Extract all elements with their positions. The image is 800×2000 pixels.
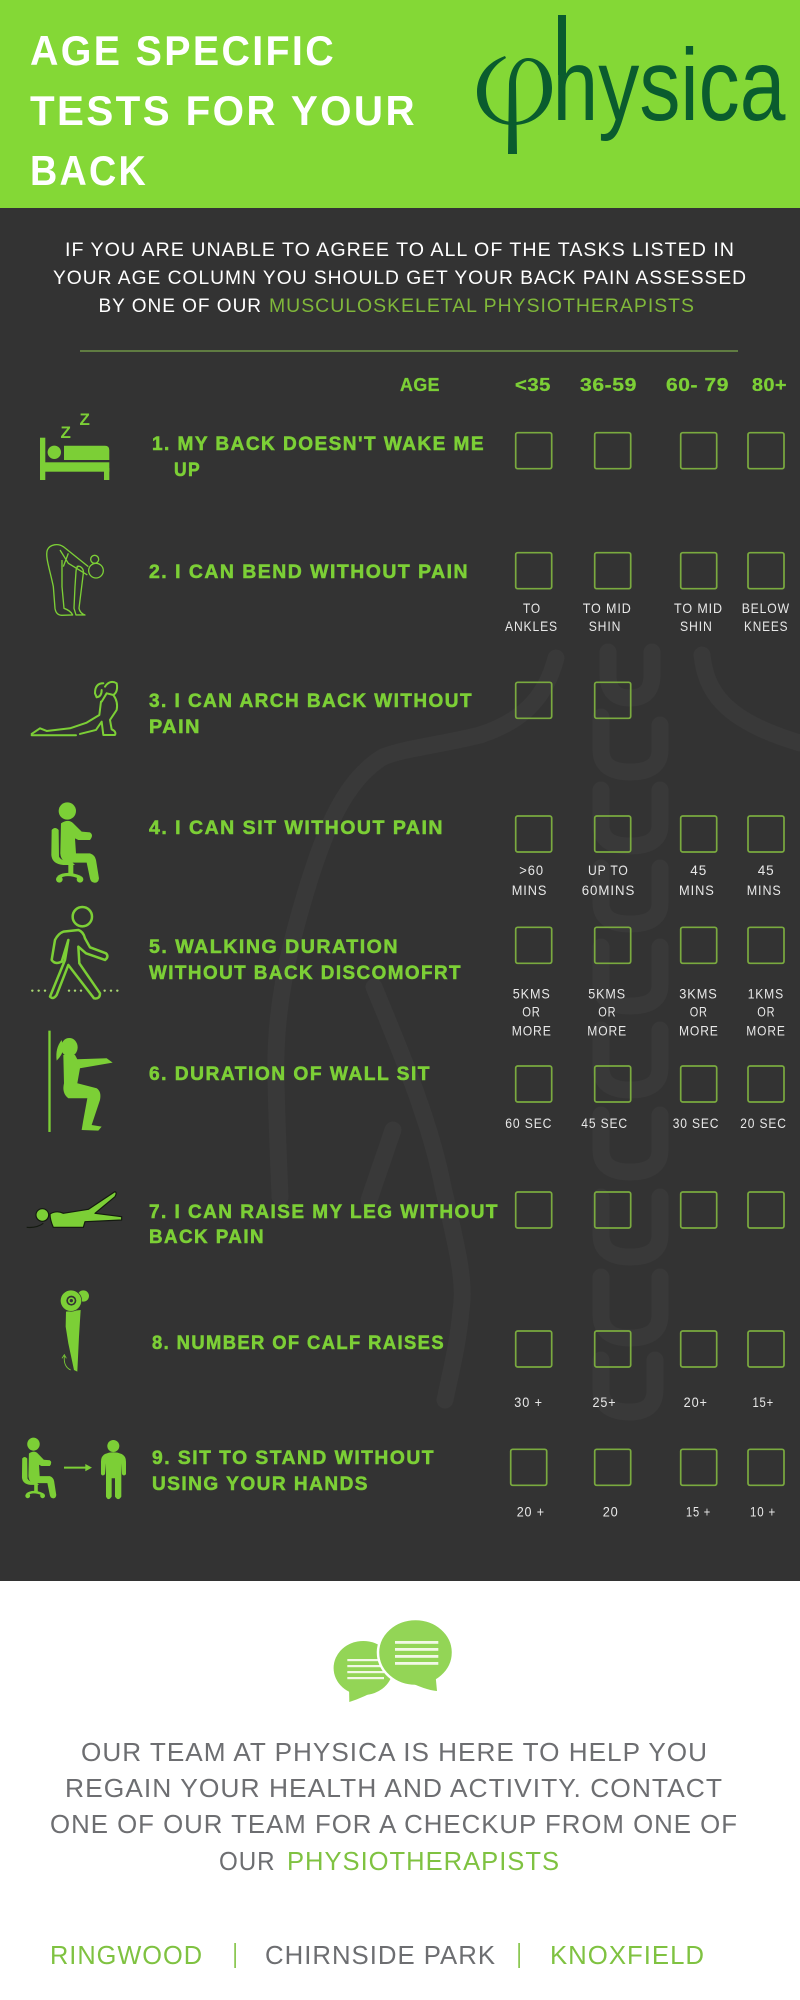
option labels: 3KMS xyxy=(679,986,718,1002)
heading: PAIN xyxy=(149,716,201,738)
intro text: BY ONE OF OUR xyxy=(98,295,262,317)
option labels: 30 + xyxy=(514,1394,543,1410)
option labels xyxy=(514,1394,774,1410)
option labels: 15 + xyxy=(686,1504,711,1520)
row 2: bend xyxy=(47,545,790,634)
option labels: OR xyxy=(690,1004,708,1020)
title xyxy=(30,27,417,194)
option labels: KNEES xyxy=(744,618,788,634)
icon: bed: Z xyxy=(60,423,71,442)
heading: 3. I CAN ARCH BACK WITHOUT xyxy=(149,690,473,712)
heading xyxy=(152,433,485,481)
heading: 6. DURATION OF WALL SIT xyxy=(149,1063,431,1085)
option labels: TO xyxy=(523,600,541,616)
age column headers: 80+ xyxy=(752,375,787,395)
checkboxes xyxy=(516,553,784,589)
option labels: MORE xyxy=(512,1022,552,1038)
footer message: OUR TEAM AT PHYSICA IS HERE TO HELP YOU xyxy=(81,1737,708,1767)
icon: wall sit xyxy=(48,1031,113,1132)
age column headers: 60- 79 xyxy=(666,375,729,395)
heading: 9. SIT TO STAND WITHOUT xyxy=(152,1447,435,1469)
clinic locations: KNOXFIELD xyxy=(550,1940,705,1970)
option labels: 20 + xyxy=(517,1504,545,1520)
option labels xyxy=(505,1115,787,1131)
checkboxes xyxy=(516,816,784,852)
heading: 8. NUMBER OF CALF RAISES xyxy=(152,1332,445,1354)
option labels: 60MINS xyxy=(582,882,635,898)
option labels: MINS xyxy=(512,882,547,898)
footer message xyxy=(50,1737,738,1876)
heading: BACK PAIN xyxy=(149,1226,265,1248)
age column headers: 36-59 xyxy=(580,375,637,395)
panel: dark test table xyxy=(0,208,800,1581)
title: AGE SPECIFIC xyxy=(30,27,336,74)
row 4: sit xyxy=(51,802,784,898)
intro text: MUSCULOSKELETAL PHYSIOTHERAPISTS xyxy=(269,295,695,317)
heading: 5. WALKING DURATION xyxy=(149,936,399,958)
checkboxes xyxy=(516,927,784,963)
option labels: OR xyxy=(757,1004,775,1020)
option labels: 1KMS xyxy=(748,986,784,1002)
option labels: SHIN xyxy=(589,618,621,634)
row 1: sleep xyxy=(40,410,784,481)
option labels xyxy=(512,862,782,898)
heading: WITHOUT BACK DISCOMOFRT xyxy=(149,962,462,984)
heading: 7. I CAN RAISE MY LEG WITHOUT xyxy=(149,1201,499,1223)
option labels: SHIN xyxy=(680,618,713,634)
clinic locations: CHIRNSIDE PARK xyxy=(265,1940,496,1970)
option labels: 20 xyxy=(603,1504,619,1520)
intro text: YOUR AGE COLUMN YOU SHOULD GET YOUR BACK PAIN ASSESSED xyxy=(53,267,747,289)
footer message: REGAIN YOUR HEALTH AND ACTIVITY. CONTACT xyxy=(65,1773,723,1803)
option labels: 45 xyxy=(758,862,775,878)
logo: physica xyxy=(477,15,786,154)
option labels: 45 xyxy=(690,862,707,878)
checkboxes xyxy=(516,1192,784,1228)
heading xyxy=(149,1201,499,1248)
checkboxes xyxy=(511,1449,784,1485)
panel: header xyxy=(0,0,800,208)
age column headers: <35 xyxy=(515,375,551,395)
icon: cobra stretch xyxy=(32,682,117,735)
footer message: PHYSIOTHERAPISTS xyxy=(287,1846,560,1876)
row 7: leg raise xyxy=(27,1192,784,1248)
option labels: ANKLES xyxy=(505,618,558,634)
checkboxes xyxy=(516,433,784,469)
watermark: back and spine outline xyxy=(276,652,800,1412)
option labels xyxy=(505,600,790,634)
option labels: OR xyxy=(598,1004,616,1020)
row 3: arch back xyxy=(32,682,631,738)
option labels: 20 SEC xyxy=(740,1115,787,1131)
footer message: ONE OF OUR TEAM FOR A CHECKUP FROM ONE OF xyxy=(50,1809,738,1839)
icon: walking person xyxy=(31,907,119,998)
icon: bed: Z xyxy=(80,410,90,429)
panel: footer xyxy=(50,1619,738,1970)
heading xyxy=(152,1447,435,1495)
heading xyxy=(149,690,473,738)
row 5: walking xyxy=(31,907,786,1038)
age column headers: AGE xyxy=(400,375,440,395)
option labels: 5KMS xyxy=(513,986,551,1002)
option labels: MORE xyxy=(587,1022,627,1038)
option labels: TO MID xyxy=(674,600,723,616)
option labels: 10 + xyxy=(750,1504,776,1520)
heading: 4. I CAN SIT WITHOUT PAIN xyxy=(149,817,444,839)
intro text: IF YOU ARE UNABLE TO AGREE TO ALL OF THE TASKS LISTED IN xyxy=(65,239,735,261)
icon: speech bubbles xyxy=(334,1619,453,1702)
footer message: OUR xyxy=(219,1846,276,1876)
row 9: sit to stand xyxy=(22,1438,784,1520)
row 6: wall sit xyxy=(48,1031,787,1132)
title: TESTS FOR YOUR xyxy=(30,87,417,134)
clinic locations xyxy=(50,1940,705,1970)
option labels: OR xyxy=(522,1004,541,1020)
heading: USING YOUR HANDS xyxy=(152,1473,369,1495)
checkboxes xyxy=(516,1066,784,1102)
option labels: 20+ xyxy=(684,1394,708,1410)
icon: calf raise with dumbbell xyxy=(60,1290,89,1372)
icon: lying leg raise xyxy=(27,1192,122,1227)
age column headers xyxy=(400,375,787,395)
heading: UP xyxy=(174,459,201,481)
option labels: MINS xyxy=(747,882,782,898)
option labels: MORE xyxy=(679,1022,719,1038)
heading: 2. I CAN BEND WITHOUT PAIN xyxy=(149,561,469,583)
icon: bed xyxy=(40,410,109,480)
divider line xyxy=(80,350,738,352)
option labels: UP TO xyxy=(588,862,629,878)
option labels: TO MID xyxy=(583,600,632,616)
heading: 1. MY BACK DOESN'T WAKE ME xyxy=(152,433,485,455)
option labels: 5KMS xyxy=(588,986,626,1002)
row 8: calf raises xyxy=(60,1290,784,1410)
icon: bending person xyxy=(47,545,103,615)
option labels: >60 xyxy=(519,862,544,878)
heading xyxy=(149,936,462,984)
option labels xyxy=(512,986,786,1038)
title: BACK xyxy=(30,147,148,194)
option labels: 60 SEC xyxy=(505,1115,552,1131)
option labels: 25+ xyxy=(592,1394,616,1410)
option labels: 30 SEC xyxy=(673,1115,719,1131)
icon: sit to stand xyxy=(22,1438,126,1499)
option labels: 15+ xyxy=(752,1394,774,1410)
icon: seated person xyxy=(51,802,99,883)
option labels: MINS xyxy=(679,882,715,898)
option labels: 45 SEC xyxy=(581,1115,628,1131)
checkboxes xyxy=(516,682,631,718)
checkboxes xyxy=(516,1331,784,1367)
intro text xyxy=(53,239,747,317)
clinic locations: RINGWOOD xyxy=(50,1940,203,1970)
option labels: BELOW xyxy=(742,600,790,616)
option labels xyxy=(517,1504,776,1520)
option labels: MORE xyxy=(746,1022,786,1038)
